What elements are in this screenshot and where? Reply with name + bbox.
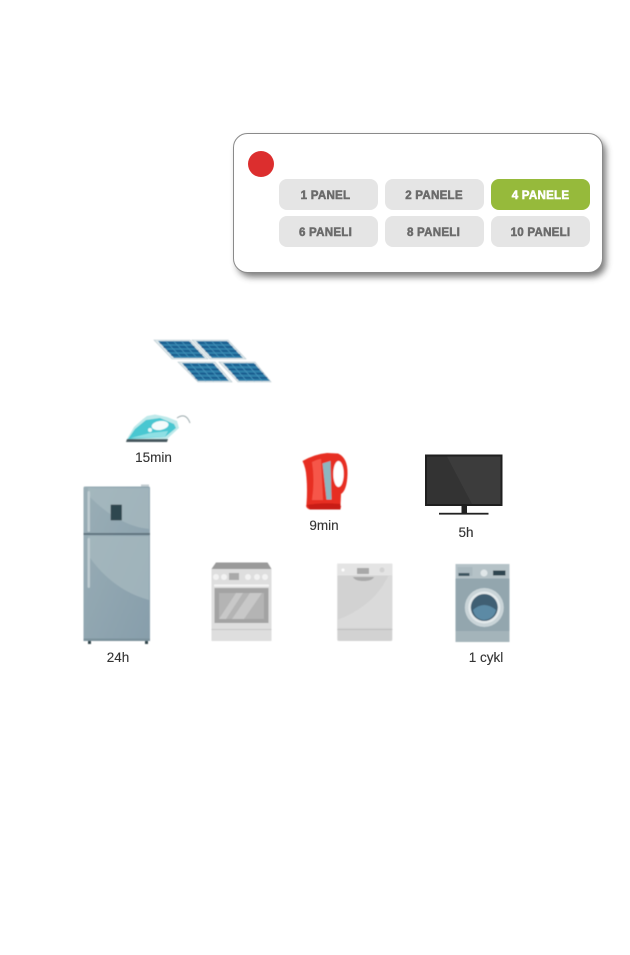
button: 4 panele selected [491,179,590,210]
panel: panel count selector [234,134,606,277]
button: 1 panel [279,179,378,210]
label: fridge time: 24h [107,650,129,665]
icon: kettle [302,453,348,510]
button: 8 paneli: 8 PANELI [407,226,460,239]
button: 4 panele selected: 4 PANELE [512,189,569,202]
icon: four solar panels [154,340,271,382]
button: 6 paneli: 6 PANELI [299,226,352,239]
icon: oven [212,562,272,641]
label: iron time: 15min [135,450,172,465]
icon: red status dot [248,151,274,177]
icon: washing machine [456,564,510,642]
label: tv time: 5h [458,525,474,540]
button: 2 panele [385,179,484,210]
label: washer cycle: 1 cykl [469,650,503,665]
icon: television [425,454,502,515]
label: kettle time: 9min [309,518,339,533]
icon: steam iron [126,414,190,442]
button: 10 paneli: 10 PANELI [511,226,570,239]
button: 2 panele: 2 PANELE [405,189,463,202]
button: 6 paneli [279,216,378,247]
button: 8 paneli [385,216,484,247]
button: 1 panel: 1 PANEL [301,189,350,202]
icon: fridge [84,484,150,644]
icon: dishwasher [337,564,392,641]
button: 10 paneli [491,216,590,247]
